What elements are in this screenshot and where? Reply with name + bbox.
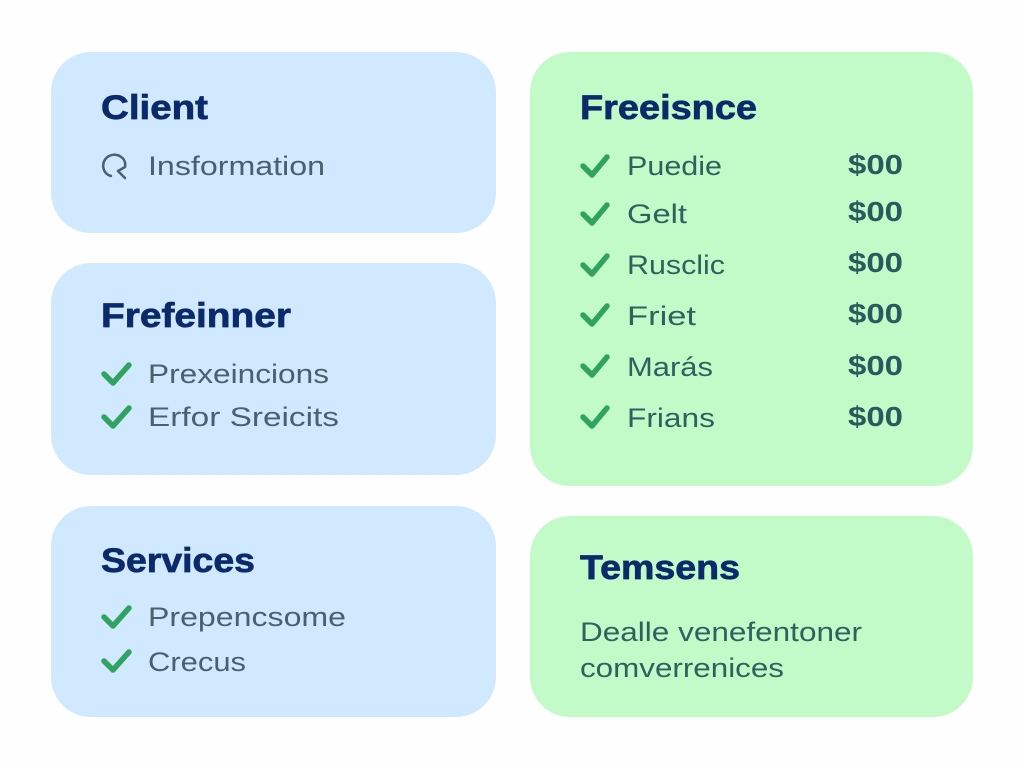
icon: check xyxy=(583,408,607,426)
price: row one: $00 xyxy=(848,149,903,180)
panel: pricing list xyxy=(530,52,973,486)
text: row four: Friet xyxy=(627,301,697,331)
text: item one: Prexeincions xyxy=(148,359,329,389)
text: item two: Crecus xyxy=(148,647,246,677)
text: row two: Gelt xyxy=(627,199,688,229)
text: row five: Marás xyxy=(627,352,713,382)
text: item one: Prepencsome xyxy=(148,602,346,632)
price: row four: $00 xyxy=(848,298,903,329)
text: terms description line two: comverrenices xyxy=(580,653,784,683)
panel: terms xyxy=(530,516,973,717)
icon: check xyxy=(104,652,129,670)
text: row one: Puedie xyxy=(627,151,722,181)
text: item two: Erfor Sreicits xyxy=(148,402,339,432)
text: terms description line one: Dealle venefentoner xyxy=(580,617,862,647)
text: row three: Rusclic xyxy=(627,250,725,280)
price: row three: $00 xyxy=(848,247,903,278)
heading: pricing list: Freeisnce xyxy=(580,89,757,127)
icon: check xyxy=(583,357,607,375)
icon: check xyxy=(583,306,607,324)
heading: client: Client xyxy=(101,89,208,127)
heading: services: Services xyxy=(101,542,255,580)
price: row five: $00 xyxy=(848,350,903,381)
icon: check xyxy=(104,365,129,383)
price: row two: $00 xyxy=(848,196,903,227)
icon: check xyxy=(583,205,607,223)
text: row six: Frians xyxy=(627,403,715,433)
icon: check xyxy=(583,157,607,175)
price: row six: $00 xyxy=(848,401,903,432)
icon: check xyxy=(104,608,129,626)
heading: terms: Temsens xyxy=(580,549,740,587)
text: information: Insformation xyxy=(148,151,325,181)
panel: client xyxy=(51,52,496,233)
icon: check xyxy=(104,408,129,426)
panel: freelancer xyxy=(51,263,496,475)
heading: freelancer: Frefeinner xyxy=(101,297,291,335)
panel: services xyxy=(51,506,496,717)
icon: search loop xyxy=(103,155,125,178)
icon: check xyxy=(583,256,607,274)
